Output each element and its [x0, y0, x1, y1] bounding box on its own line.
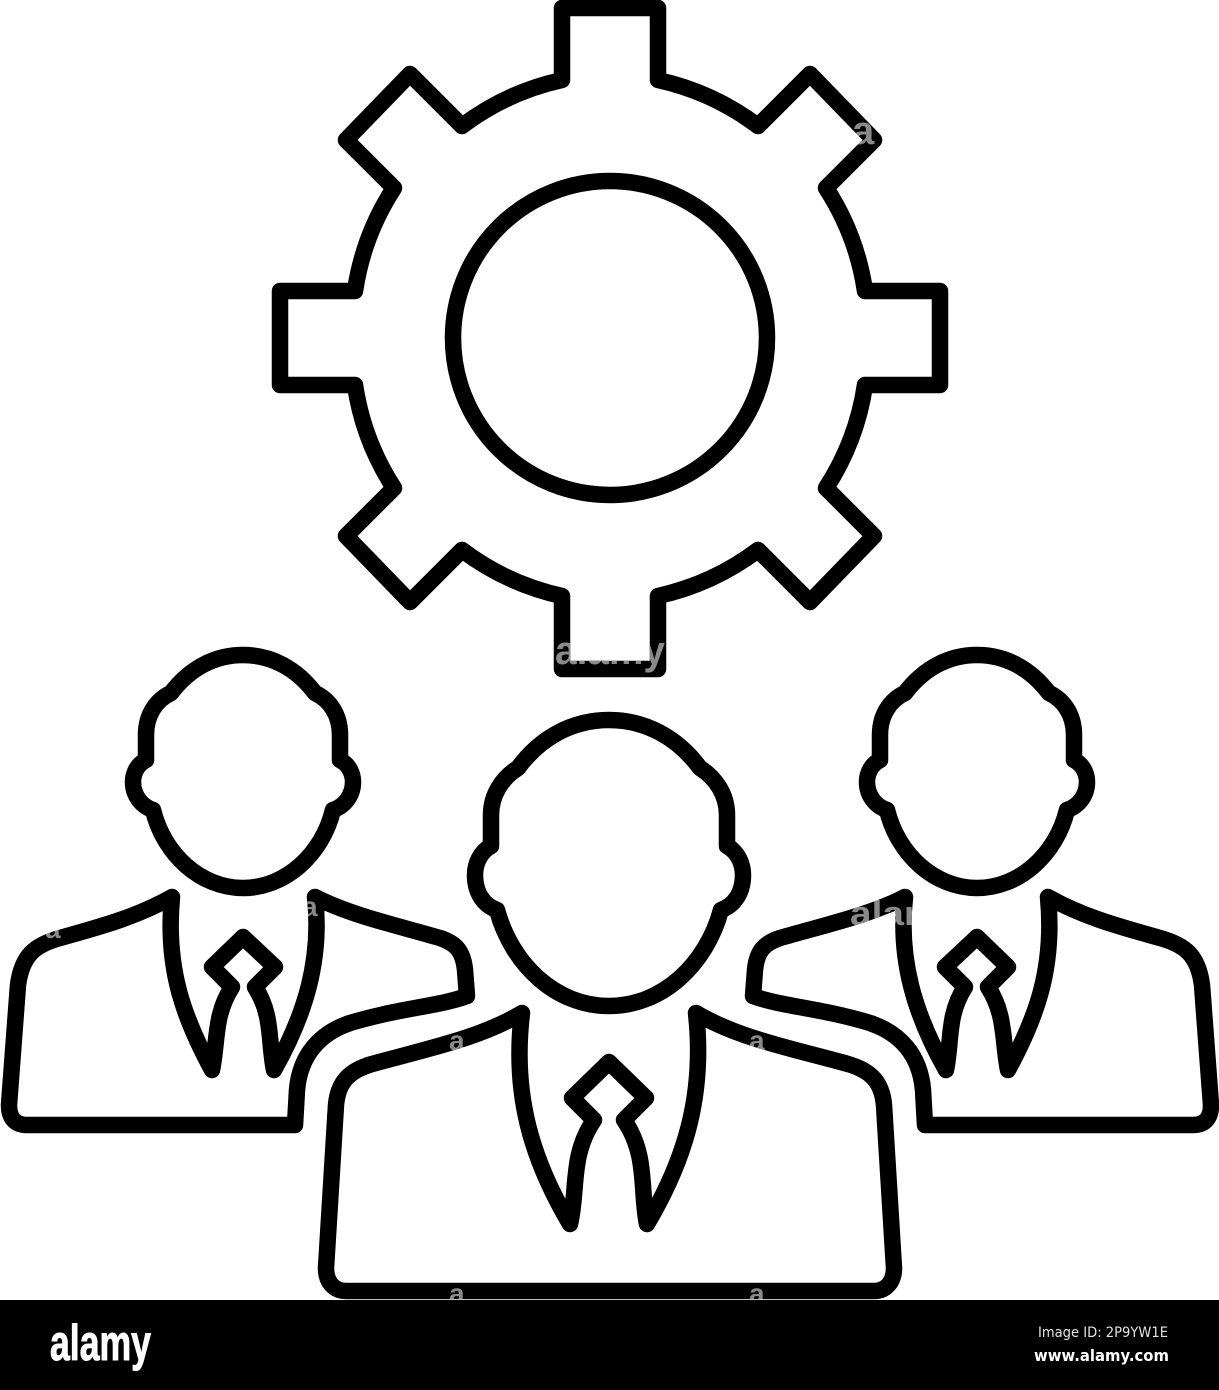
- watermark fragments: a: [449, 1278, 465, 1309]
- website: www.alamy.com: [1034, 1346, 1169, 1365]
- watermark fragments: a: [749, 1025, 765, 1056]
- icon: gear: [280, 8, 940, 669]
- watermark fragments: [45, 109, 960, 1309]
- watermark fragments: a: [852, 109, 875, 153]
- icon: center businessman: [326, 720, 894, 1291]
- image id: Image ID: 2P9YW1E: [1038, 1325, 1168, 1341]
- watermark fragments: a: [302, 891, 318, 922]
- watermark fragments: alamy: [850, 895, 960, 933]
- watermark fragments: alamy: [555, 629, 666, 673]
- watermark fragments: a: [749, 1278, 765, 1309]
- icon: right businessman: [753, 655, 1211, 1125]
- icon: left businessman: [9, 655, 467, 1125]
- watermark fragments: a: [449, 1025, 465, 1056]
- watermark fragments: a: [45, 913, 61, 944]
- footer logo: alamy: [50, 1315, 151, 1371]
- footer bar: [0, 1300, 1219, 1390]
